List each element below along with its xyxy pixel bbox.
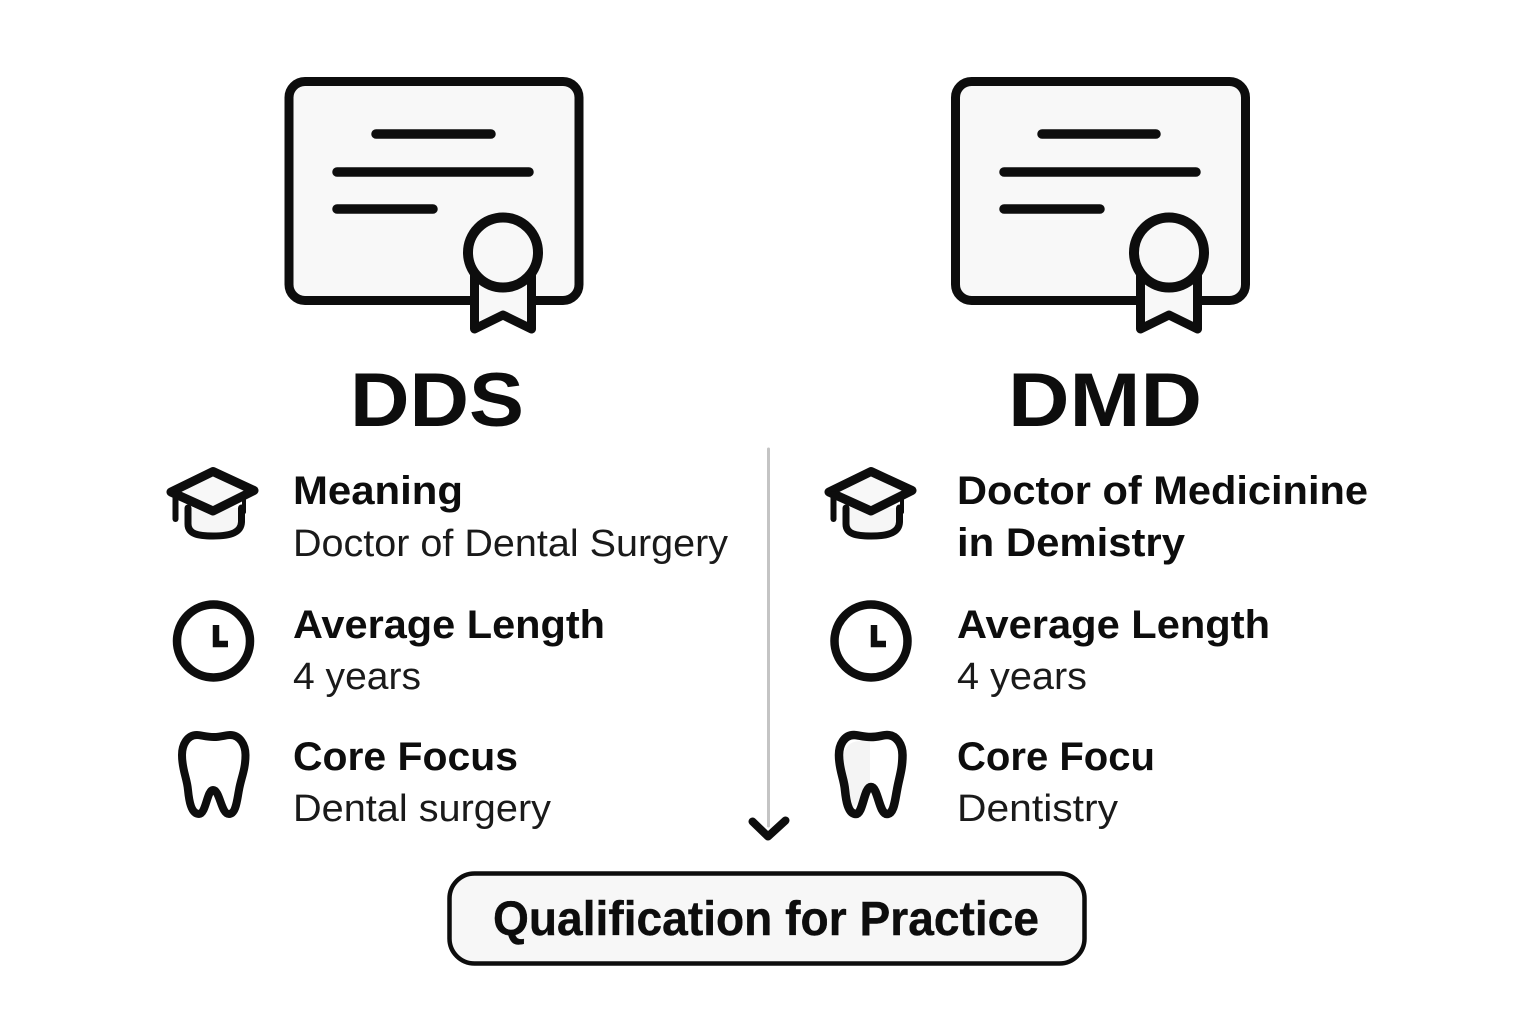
text: core focus DDS: Dental surgery bbox=[293, 788, 551, 830]
callout: qualification for practice bbox=[450, 874, 1084, 964]
text: average length DMD bbox=[957, 603, 1270, 698]
text: average length DDS: Average Length bbox=[293, 603, 605, 647]
icon: tooth left bbox=[182, 735, 246, 814]
text: meaning DDS bbox=[293, 469, 728, 565]
text: meaning DDS: Doctor of Dental Surgery bbox=[293, 523, 728, 565]
text: core focus DDS: Core Focus bbox=[293, 735, 518, 779]
icon: graduation cap right bbox=[829, 472, 912, 536]
text: average length DMD: 4 years bbox=[957, 656, 1087, 698]
text: average length DMD: Average Length bbox=[957, 603, 1270, 647]
icon: DMD certificate bbox=[956, 82, 1246, 329]
callout: qualification for practice: Qualification for Practice bbox=[493, 893, 1039, 946]
text: meaning DMD bbox=[957, 469, 1368, 565]
heading: DDS: DDS bbox=[350, 358, 524, 443]
icon: clock left bbox=[177, 604, 250, 678]
text: meaning DMD: in Demistry bbox=[957, 521, 1186, 565]
icon: DDS certificate bbox=[289, 82, 579, 329]
icon: clock right bbox=[834, 604, 908, 678]
text: core focus DMD: Dentistry bbox=[957, 788, 1118, 830]
icon: graduation cap left bbox=[171, 472, 254, 536]
text: core focus DMD bbox=[957, 735, 1155, 830]
center divider arrow bbox=[752, 449, 786, 836]
heading: DMD: DMD bbox=[1008, 358, 1202, 443]
icon: tooth right bbox=[839, 735, 902, 814]
text: core focus DDS bbox=[293, 735, 551, 830]
text: meaning DDS: Meaning bbox=[293, 469, 463, 513]
text: average length DDS bbox=[293, 603, 605, 698]
text: average length DDS: 4 years bbox=[293, 656, 421, 698]
text: core focus DMD: Core Focu bbox=[957, 735, 1155, 779]
text: meaning DMD: Doctor of Medicinine bbox=[957, 469, 1368, 513]
